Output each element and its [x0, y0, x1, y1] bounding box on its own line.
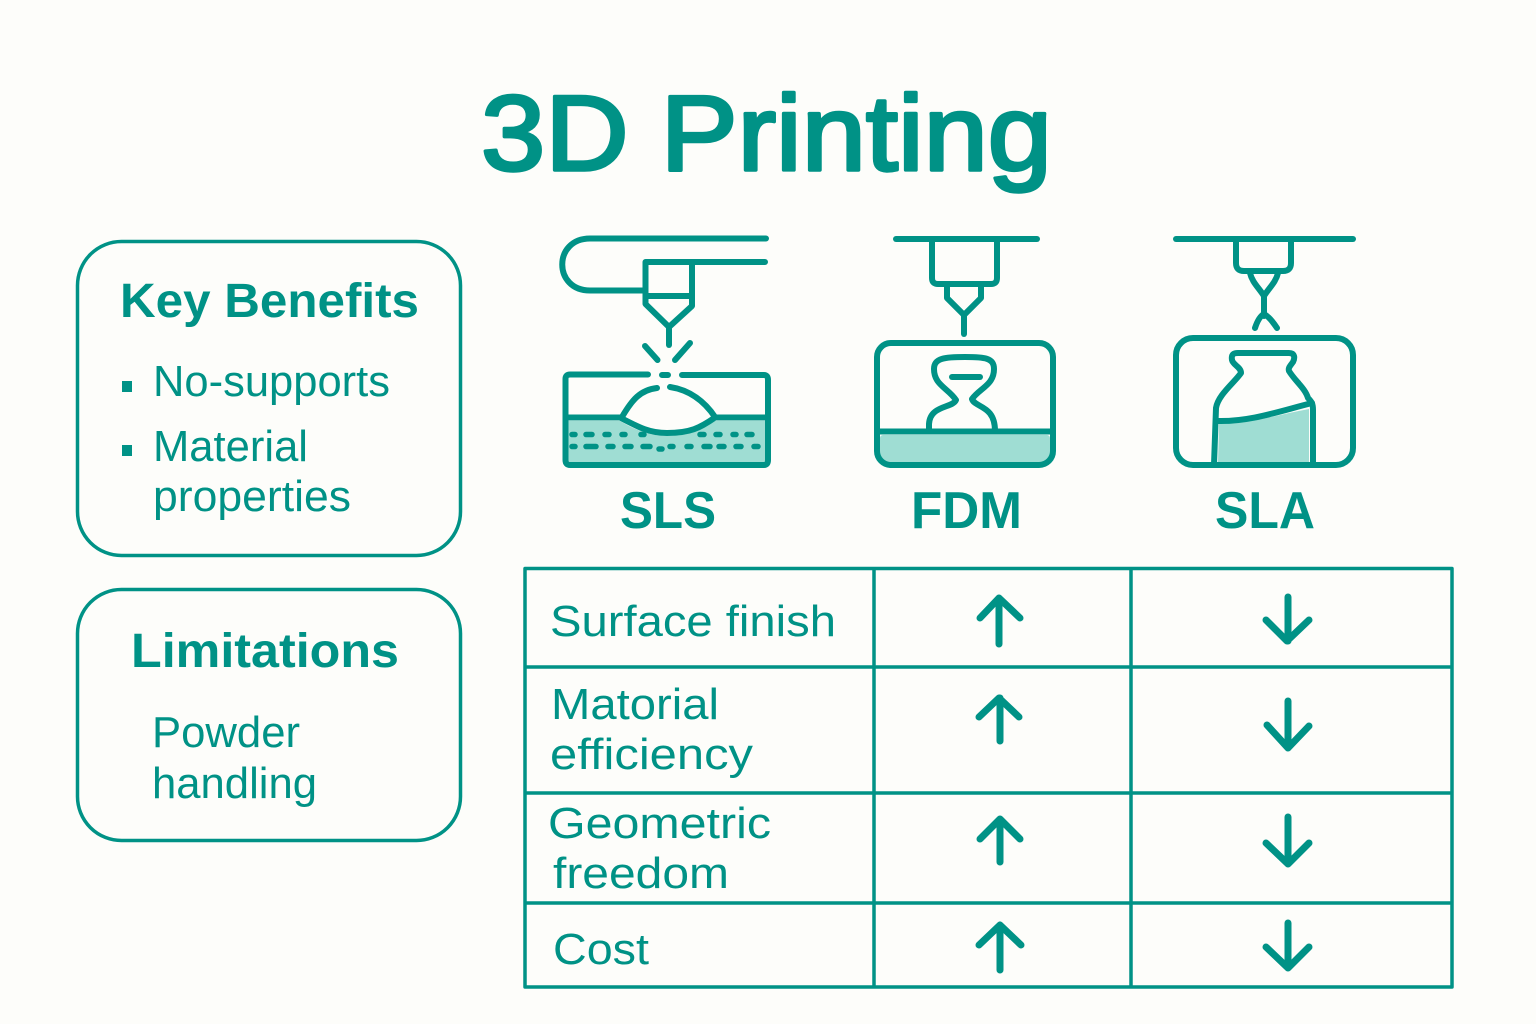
- panel: key benefits: [78, 242, 460, 556]
- label: SLS: SLS: [620, 482, 716, 540]
- row: material efficiency: Matorial: [551, 680, 719, 729]
- label: SLA: SLA: [1215, 482, 1315, 540]
- row: surface finish: Surface finish: [550, 597, 836, 646]
- text: powder handling: handling: [152, 759, 317, 808]
- title: 3D Printing: [481, 73, 1052, 193]
- row: surface finish: [550, 597, 1309, 646]
- bullet: no-supports: No-supports: [153, 357, 390, 406]
- row: geometric freedom: Geometric: [548, 799, 771, 848]
- icon: SLS printer: [562, 238, 768, 465]
- row: geometric freedom: [548, 799, 1309, 898]
- label: FDM: FDM: [911, 482, 1022, 540]
- bullet: material properties: Material: [153, 422, 308, 471]
- icon: FDM printer: [877, 239, 1053, 465]
- text: powder handling: [152, 708, 317, 808]
- row: cost: [553, 923, 1309, 974]
- panel: limitations: [78, 590, 460, 840]
- text: powder handling: Powder: [152, 708, 300, 757]
- comparison table: [525, 568, 1452, 987]
- icon: SLA printer: [1176, 239, 1353, 465]
- row: material efficiency: [550, 680, 1309, 779]
- bullet: material properties: properties: [153, 472, 351, 521]
- row: material efficiency: efficiency: [550, 730, 753, 779]
- heading: key benefits: Key Benefits: [120, 275, 419, 328]
- row: geometric freedom: freedom: [553, 849, 729, 898]
- heading: limitations: Limitations: [131, 625, 399, 678]
- row: cost: Cost: [553, 925, 649, 974]
- bullet: material properties: [122, 422, 351, 521]
